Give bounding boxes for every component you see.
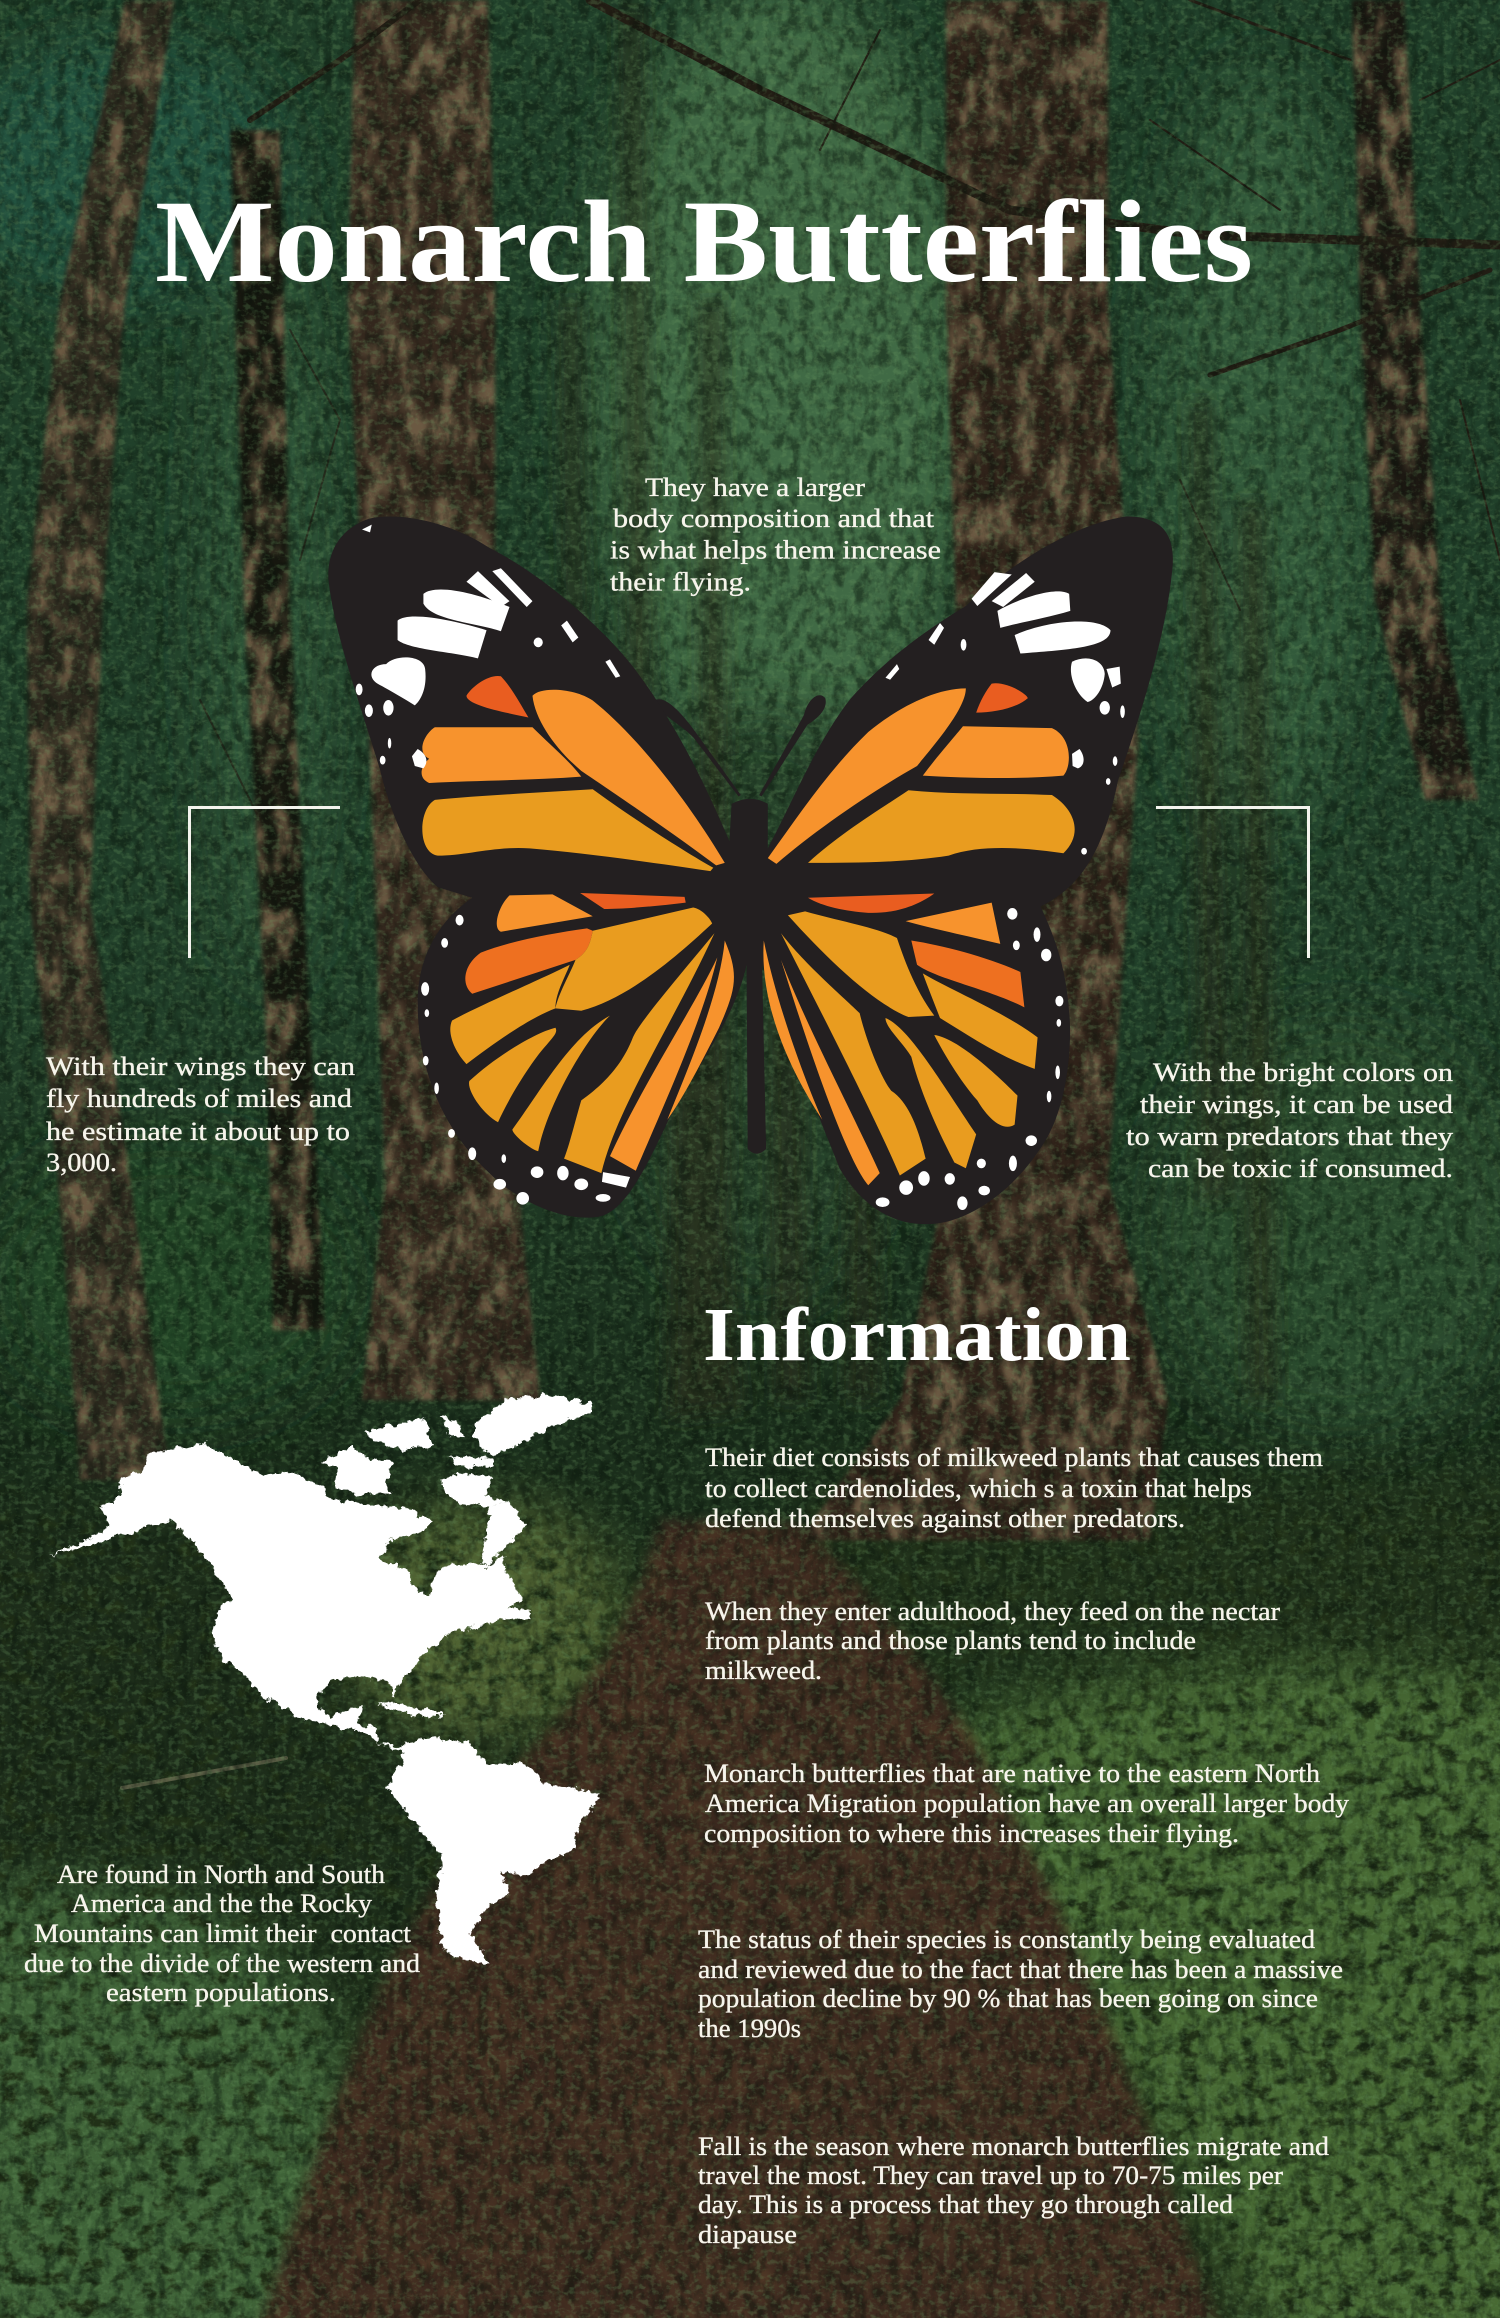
bracket: left [190,808,340,958]
foreground trunks [27,0,1478,1540]
butterfly illustration [328,516,1173,1224]
text block: body composition: their flying. [610,568,751,596]
text block: range: due to the divide of the western and [24,1949,420,1978]
text block: flight range [46,1052,355,1177]
wings silhouette [328,516,1173,1224]
text block: range: eastern populations. [106,1978,336,2007]
right hindwing cells [763,893,1038,1185]
text block: adulthood: from plants and those plants tend to include [705,1626,1196,1655]
text block: diet: Their diet consists of milkweed plants that causes them [705,1443,1323,1472]
text block: range: America and the the Rocky [71,1889,372,1918]
white wing markings [356,525,1125,1210]
left forewing cells [422,676,725,871]
text block: range [24,1860,420,2007]
text block: diet: to collect cardenolides, which s a toxin that helps [705,1474,1252,1503]
title: Monarch Butterflies [155,176,1253,307]
text block: species status: The status of their species is constantly being evaluated [698,1925,1315,1954]
bracket: right [1156,808,1308,958]
greenland [473,1395,592,1456]
text block: range: Mountains can limit their contact [34,1919,412,1948]
text block: adulthood: When they enter adulthood, they feed on the nectar [705,1597,1280,1626]
right forewing cells [768,683,1075,864]
text block: migration population: composition to where this increases their flying. [704,1819,1239,1848]
text block: species status: and reviewed due to the fact that there has been a massive [698,1955,1343,1984]
text block: fall migration: travel the most. They can travel up to 70-75 miles per [698,2161,1283,2190]
text block: adulthood [705,1597,1280,1685]
heading: information: Information [703,1293,1131,1377]
text block: migration population: Monarch butterflies that are native to the eastern North [704,1759,1320,1788]
text block: adulthood: milkweed. [705,1656,822,1685]
antilles [375,1704,447,1717]
south america [388,1738,600,1963]
text block: body composition: They have a larger [645,473,865,502]
text block: flight range: With their wings they can [46,1052,355,1081]
branches [122,0,1500,1788]
map: the Americas [49,1395,600,1963]
text block: fall migration: Fall is the season where monarch butterflies migrate and [698,2132,1329,2161]
distant trunks [560,0,1276,1420]
text block: diet: defend themselves against other predators. [705,1504,1185,1533]
text block: body composition: is what helps them increase [610,536,941,564]
text block: fall migration: day. This is a process that they go through called [698,2190,1233,2219]
text block: warning colors: their wings, it can be used [1140,1090,1453,1119]
text block: fall migration: diapause [698,2220,797,2249]
text block: fall migration [698,2132,1329,2249]
text block: warning colors: With the bright colors on [1153,1058,1453,1087]
text block: flight range: he estimate it about up to [46,1117,350,1146]
north america [49,1443,530,1752]
text block: warning colors [1126,1058,1453,1183]
forest path [240,1520,1240,2318]
quebec and labrador [481,1503,526,1567]
text block: species status: the 1990s [698,2014,801,2043]
text block: warning colors: to warn predators that they [1126,1122,1453,1151]
ground: moss banks [0,1480,1500,2318]
text block: body composition: body composition and that [613,504,935,533]
text block: diet [705,1443,1323,1533]
text block: body composition [610,473,941,596]
text block: warning colors: can be toxic if consumed. [1148,1154,1453,1183]
text block: migration population: America Migration population have an overall larger body [705,1789,1349,1818]
text block: species status: population decline by 90 % that has been going on since [698,1984,1318,2013]
arctic islands [320,1416,510,1507]
left hindwing cells [450,893,734,1173]
text block: species status [698,1925,1343,2043]
text block: flight range: fly hundreds of miles and [46,1084,352,1113]
text block: migration population [704,1759,1349,1848]
text block: flight range: 3,000. [46,1148,117,1177]
antennae [655,695,826,797]
text block: range: Are found in North and South [57,1860,385,1889]
